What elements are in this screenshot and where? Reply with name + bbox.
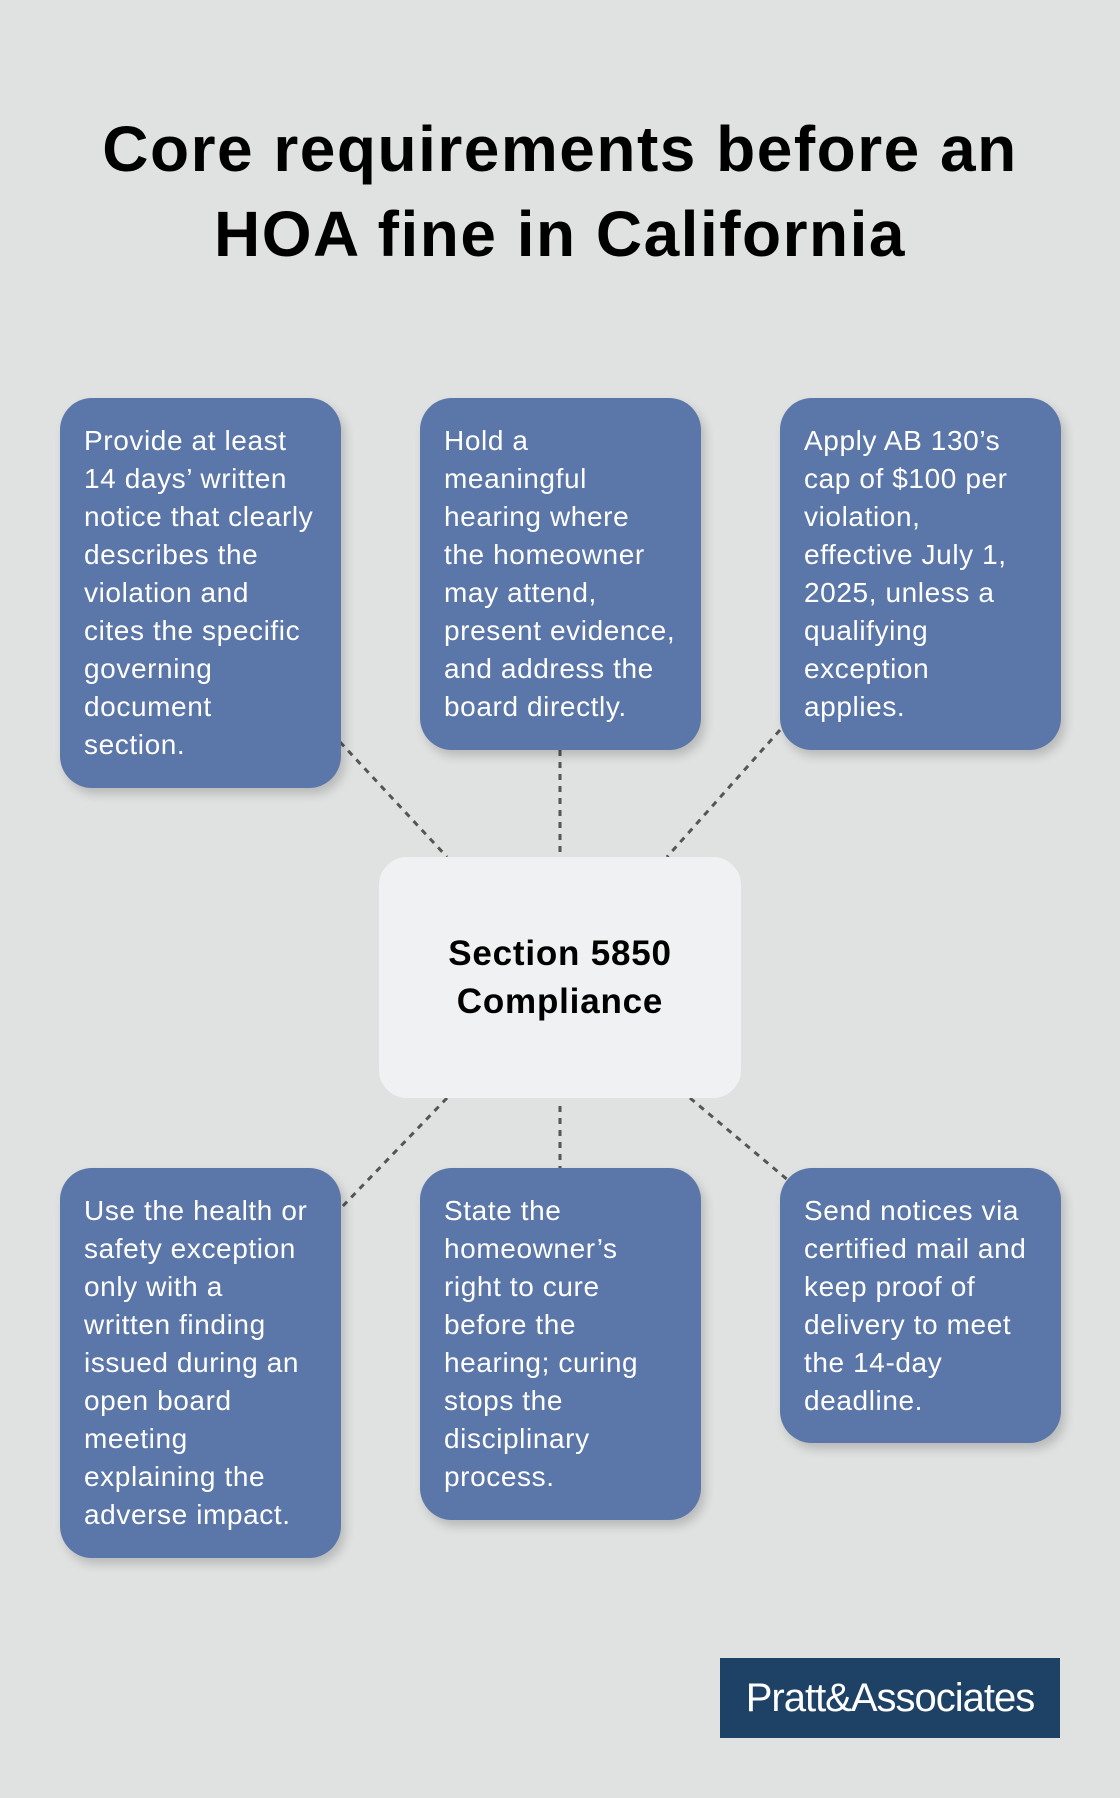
box: right to cure: before the xyxy=(444,1309,576,1340)
box: hearing xyxy=(420,398,701,750)
box: health exception: open board xyxy=(84,1385,232,1416)
box: cap: effective July 1, xyxy=(804,539,1007,570)
box: right to cure: State the xyxy=(444,1195,561,1226)
center box: Section 5850 xyxy=(448,934,672,972)
center box xyxy=(379,857,741,1098)
title: Core requirements before an xyxy=(102,113,1018,185)
box: health exception: explaining the xyxy=(84,1461,265,1492)
box: cap: violation, xyxy=(804,501,921,532)
box: certified mail: keep proof of xyxy=(804,1271,975,1302)
box: health exception: Use the health or xyxy=(84,1195,307,1226)
box: cap: qualifying xyxy=(804,615,928,646)
center box: Compliance xyxy=(457,982,663,1020)
box: notice: violation and xyxy=(84,577,249,608)
box: right to cure: right to cure xyxy=(444,1271,600,1302)
box: notice: Provide at least xyxy=(84,425,287,456)
box: health exception: issued during an xyxy=(84,1347,299,1378)
logo: Pratt&Associates xyxy=(746,1676,1034,1720)
title: HOA fine in California xyxy=(214,198,906,270)
box: health exception: only with a xyxy=(84,1271,223,1302)
box: health exception xyxy=(60,1168,341,1558)
box: hearing: Hold a xyxy=(444,425,529,456)
box: certified mail: certified mail and xyxy=(804,1233,1026,1264)
box: health exception: safety exception xyxy=(84,1233,296,1264)
title xyxy=(102,113,1018,270)
box: notice: 14 days’ written xyxy=(84,463,287,494)
box: hearing: may attend, xyxy=(444,577,597,608)
box: right to cure: disciplinary xyxy=(444,1423,590,1454)
box: health exception: meeting xyxy=(84,1423,188,1454)
box: notice: document xyxy=(84,691,212,722)
box: certified mail: deadline. xyxy=(804,1385,923,1416)
box: cap xyxy=(780,398,1061,750)
box: certified mail: the 14-day xyxy=(804,1347,942,1378)
box: notice: governing xyxy=(84,653,212,684)
box: hearing: and address the xyxy=(444,653,654,684)
box: health exception: written finding xyxy=(84,1309,266,1340)
box: hearing: present evidence, xyxy=(444,615,675,646)
box: right to cure: stops the xyxy=(444,1385,563,1416)
box: notice: describes the xyxy=(84,539,258,570)
box: notice: notice that clearly xyxy=(84,501,313,532)
box: certified mail xyxy=(780,1168,1061,1443)
box: certified mail: delivery to meet xyxy=(804,1309,1011,1340)
box: right to cure: process. xyxy=(444,1461,555,1492)
box: hearing: the homeowner xyxy=(444,539,645,570)
box: certified mail: Send notices via xyxy=(804,1195,1019,1226)
box: cap: 2025, unless a xyxy=(804,577,995,608)
box: right to cure: hearing; curing xyxy=(444,1347,638,1378)
box: right to cure: homeowner’s xyxy=(444,1233,618,1264)
box: hearing: board directly. xyxy=(444,691,627,722)
box: notice: section. xyxy=(84,729,185,760)
box: hearing: hearing where xyxy=(444,501,629,532)
box: hearing: meaningful xyxy=(444,463,587,494)
box: health exception: adverse impact. xyxy=(84,1499,291,1530)
box: right to cure xyxy=(420,1168,701,1520)
box: cap: exception xyxy=(804,653,929,684)
box: cap: cap of $100 per xyxy=(804,463,1008,494)
box: notice: cites the specific xyxy=(84,615,300,646)
box: notice xyxy=(60,398,341,788)
box: cap: Apply AB 130’s xyxy=(804,425,1000,456)
box: cap: applies. xyxy=(804,691,905,722)
logo xyxy=(720,1658,1060,1738)
